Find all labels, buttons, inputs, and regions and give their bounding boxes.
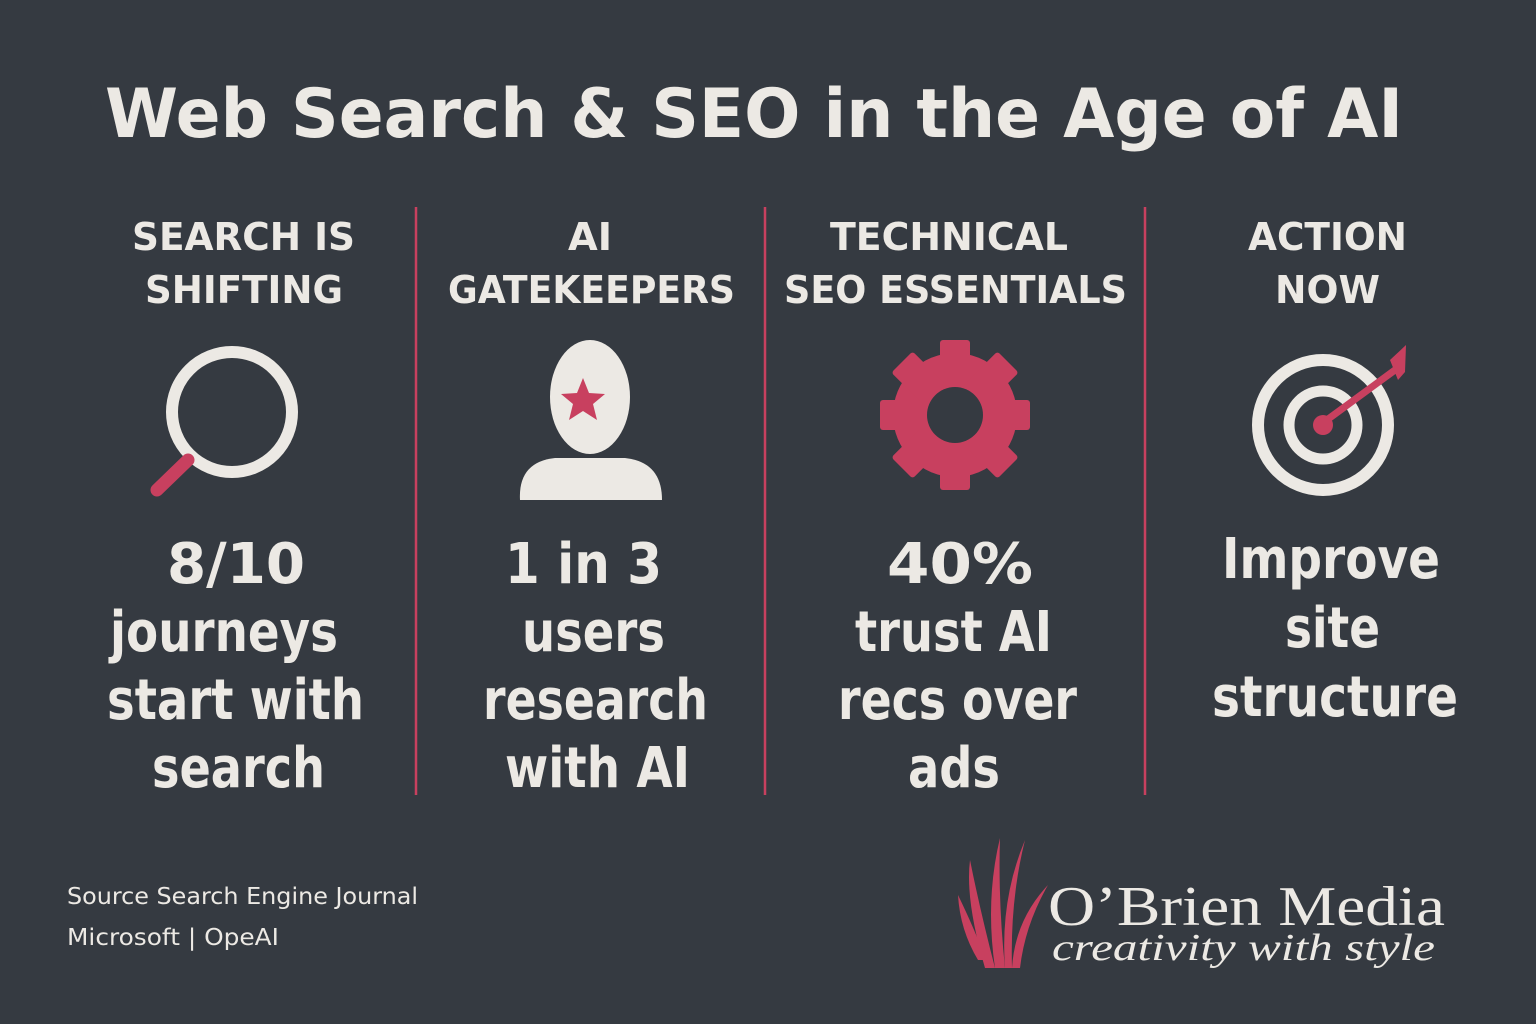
icon: grass bbox=[958, 838, 1048, 968]
icon: target bbox=[1258, 345, 1406, 490]
source text bbox=[67, 884, 418, 951]
stat: trust: trust AI bbox=[855, 600, 1052, 665]
stat: users: 1 in 3 bbox=[505, 532, 662, 597]
stat: trust: 40% bbox=[887, 532, 1033, 597]
source text: Source Search Engine Journal bbox=[67, 884, 418, 910]
heading: search is shifting: SEARCH IS bbox=[132, 215, 355, 259]
heading: ai gatekeepers: GATEKEEPERS bbox=[448, 268, 735, 312]
panel: ai gatekeepers bbox=[448, 215, 735, 801]
title: Web Search & SEO in the Age of AI bbox=[105, 75, 1403, 154]
logo tagline: creativity with style bbox=[1052, 927, 1435, 969]
stat: trust: ads bbox=[908, 736, 1000, 801]
heading: technical seo: TECHNICAL bbox=[830, 215, 1068, 259]
icon: magnifier bbox=[157, 352, 292, 490]
heading: ai gatekeepers bbox=[448, 215, 735, 312]
stat: users: users bbox=[522, 600, 665, 665]
heading: action now: ACTION bbox=[1248, 215, 1407, 259]
stat: trust: recs over bbox=[838, 668, 1077, 733]
panel: technical seo bbox=[784, 215, 1127, 801]
logo name: O’Brien Media bbox=[1048, 876, 1445, 938]
stat: improve: site bbox=[1285, 596, 1380, 661]
icon: gear bbox=[880, 340, 1030, 490]
stat: journeys: start with bbox=[107, 668, 364, 733]
stat: improve: structure bbox=[1212, 665, 1458, 730]
stat: users bbox=[483, 532, 708, 801]
heading: action now bbox=[1248, 215, 1407, 312]
stat: journeys: 8/10 bbox=[167, 532, 305, 597]
stat: users: research bbox=[483, 668, 708, 733]
stat: trust bbox=[838, 532, 1077, 801]
heading: technical seo: SEO ESSENTIALS bbox=[784, 268, 1127, 312]
panel: action now bbox=[1212, 215, 1458, 730]
stat: improve bbox=[1212, 527, 1458, 730]
heading: ai gatekeepers: AI bbox=[568, 215, 612, 259]
stat: journeys: journeys bbox=[108, 600, 338, 665]
heading: search is shifting: SHIFTING bbox=[145, 268, 343, 312]
heading: search is shifting bbox=[132, 215, 355, 312]
heading: technical seo bbox=[784, 215, 1127, 312]
stat: journeys: search bbox=[152, 736, 325, 801]
panel: search is shifting bbox=[107, 215, 364, 801]
stat: users: with AI bbox=[505, 736, 690, 801]
source text: Microsoft | OpeAI bbox=[67, 925, 279, 951]
icon: person with star bbox=[520, 340, 662, 500]
heading: action now: NOW bbox=[1275, 268, 1380, 312]
stat: improve: Improve bbox=[1222, 527, 1440, 592]
logo bbox=[958, 838, 1445, 969]
stat: journeys bbox=[107, 532, 364, 801]
